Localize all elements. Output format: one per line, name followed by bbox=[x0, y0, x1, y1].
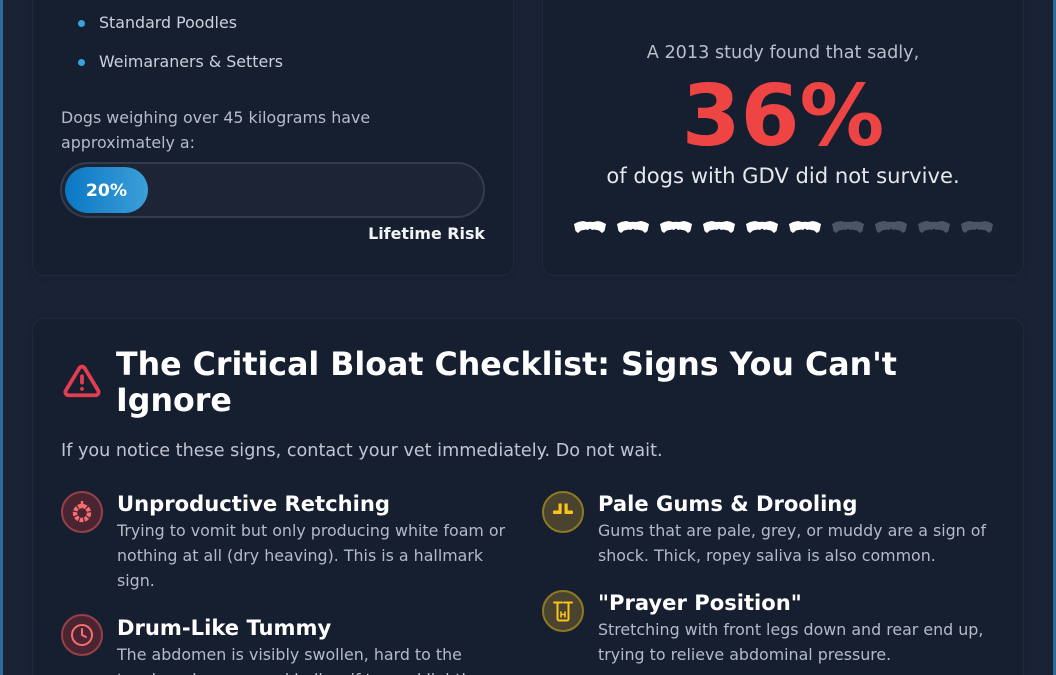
checklist heading: Ignore bbox=[116, 382, 232, 418]
sign title: Drum-Like Tummy bbox=[117, 615, 331, 640]
sign: unproductive retching bbox=[61, 491, 506, 590]
sign description: Stretching with front legs down and rear end up, bbox=[598, 620, 983, 639]
sign description: Trying to vomit but only producing white foam or bbox=[117, 521, 505, 540]
sign description bbox=[598, 521, 986, 565]
sign description bbox=[116, 645, 478, 675]
sign description bbox=[598, 620, 983, 664]
sign description: Gums that are pale, grey, or muddy are a sign of bbox=[598, 521, 986, 540]
sign: pale gums and drooling bbox=[542, 491, 986, 565]
sign title: Unproductive Retching bbox=[117, 491, 390, 516]
panel: at-risk breeds bbox=[32, 0, 514, 276]
progress fill: 20% bbox=[86, 181, 127, 201]
weight risk text: Dogs weighing over 45 kilograms have bbox=[61, 108, 370, 127]
sign description: trying to relieve abdominal pressure. bbox=[598, 645, 891, 664]
breed: weimaraners and setters: Weimaraners & Setters bbox=[99, 52, 283, 71]
bullet: weimaraners bbox=[78, 59, 85, 66]
right edge accent bar bbox=[1053, 0, 1056, 675]
icon: gums bbox=[542, 491, 584, 533]
icon: warning triangle bbox=[64, 364, 100, 398]
sign title: "Prayer Position" bbox=[598, 590, 802, 615]
sign: drum-like tummy bbox=[61, 614, 478, 675]
sign description: The abdomen is visibly swollen, hard to the bbox=[117, 645, 462, 664]
checklist intro: If you notice these signs, contact your vet immediately. Do not wait. bbox=[61, 441, 663, 461]
panel: critical bloat checklist bbox=[32, 318, 1024, 675]
lifetime risk label: Lifetime Risk bbox=[368, 224, 485, 243]
left edge accent bar bbox=[0, 0, 3, 675]
bullet: standard poodles bbox=[78, 20, 85, 27]
progress fill bbox=[65, 167, 148, 213]
panel: survival statistic bbox=[542, 0, 1024, 276]
stat caption: of dogs with GDV did not survive. bbox=[606, 163, 960, 188]
weight risk text: approximately a: bbox=[61, 133, 195, 152]
weight risk text bbox=[61, 108, 370, 152]
sign title: Pale Gums & Drooling bbox=[598, 491, 857, 516]
icon: prayer position bbox=[542, 590, 584, 632]
big stat 36%: 36% bbox=[682, 66, 884, 165]
study intro: A 2013 study found that sadly, bbox=[647, 43, 919, 63]
icon: retching bbox=[61, 491, 103, 533]
icon row: 6 of 10 dogs bbox=[574, 221, 993, 233]
sign description: shock. Thick, ropey saliva is also common. bbox=[598, 546, 936, 565]
checklist heading bbox=[116, 346, 897, 418]
sign description bbox=[116, 521, 506, 590]
breed: standard poodles: Standard Poodles bbox=[99, 13, 237, 32]
sign: prayer position bbox=[542, 590, 983, 664]
sign description: sign. bbox=[117, 571, 155, 590]
breed list bbox=[78, 13, 283, 71]
sign description: nothing at all (dry heaving). This is a hallmark bbox=[117, 546, 483, 565]
progress bar: 20% lifetime risk bbox=[60, 162, 485, 218]
icon: clock bbox=[61, 614, 103, 656]
checklist heading: The Critical Bloat Checklist: Signs You Can't bbox=[116, 346, 897, 382]
